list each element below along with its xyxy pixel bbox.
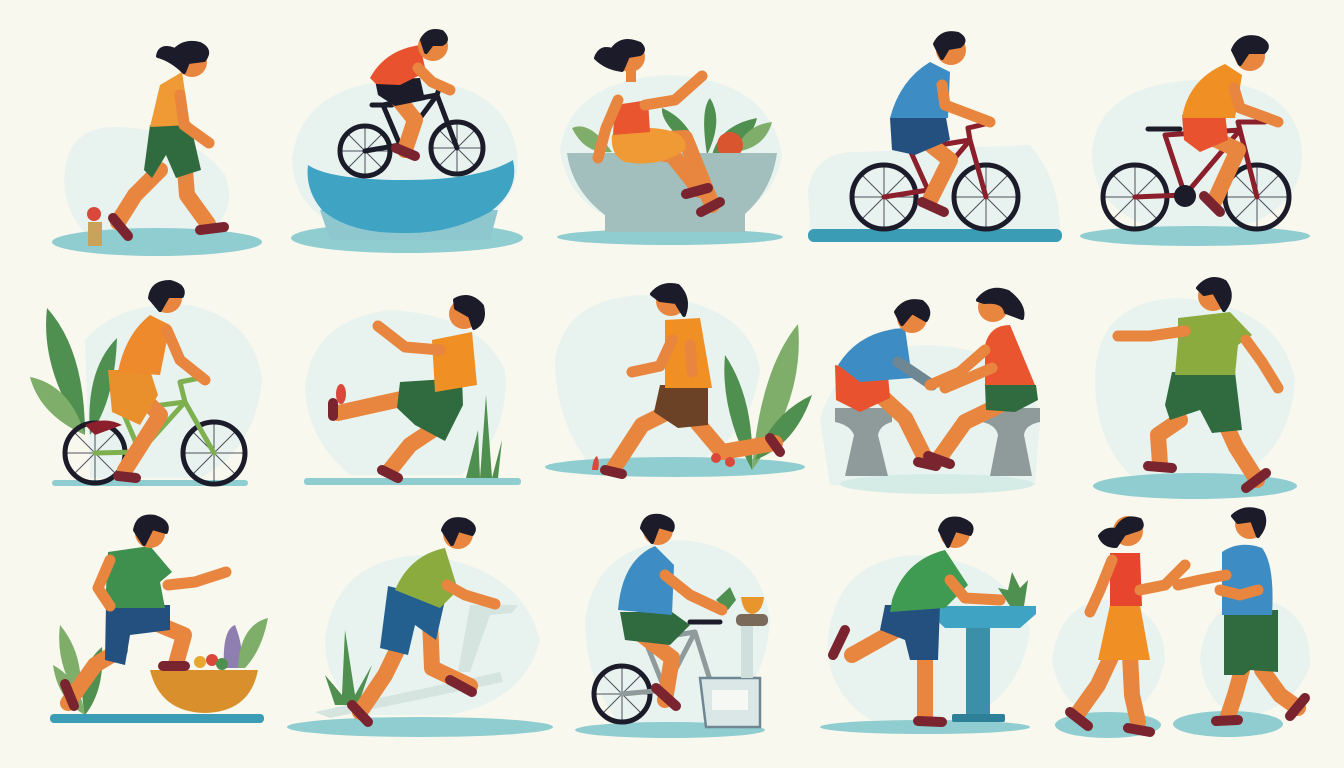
panel: cyclist in orange shirt bbox=[1080, 37, 1310, 246]
panel: runner lunging with plant bbox=[545, 285, 812, 477]
panel: cyclist in blue shirt bbox=[808, 33, 1062, 242]
panel: woman seated on basin bbox=[557, 41, 783, 245]
panel: woman walking bbox=[52, 43, 262, 256]
panel: man at exercise machine bbox=[287, 519, 553, 737]
panel: green bicycle rider with plant bbox=[30, 282, 262, 486]
panel: man kicking bbox=[304, 297, 521, 485]
panel: man with fruit bowl bbox=[50, 517, 268, 723]
panel: cyclist on blue bowl bbox=[291, 31, 523, 253]
panel: man on stationary bike with drink bbox=[575, 515, 770, 738]
panel: two people talking bbox=[1052, 509, 1310, 738]
panel: man at blue fountain table bbox=[820, 518, 1036, 734]
panel: man in olive shirt stepping bbox=[1093, 279, 1297, 499]
panel: two people seated on stools bbox=[820, 290, 1040, 494]
